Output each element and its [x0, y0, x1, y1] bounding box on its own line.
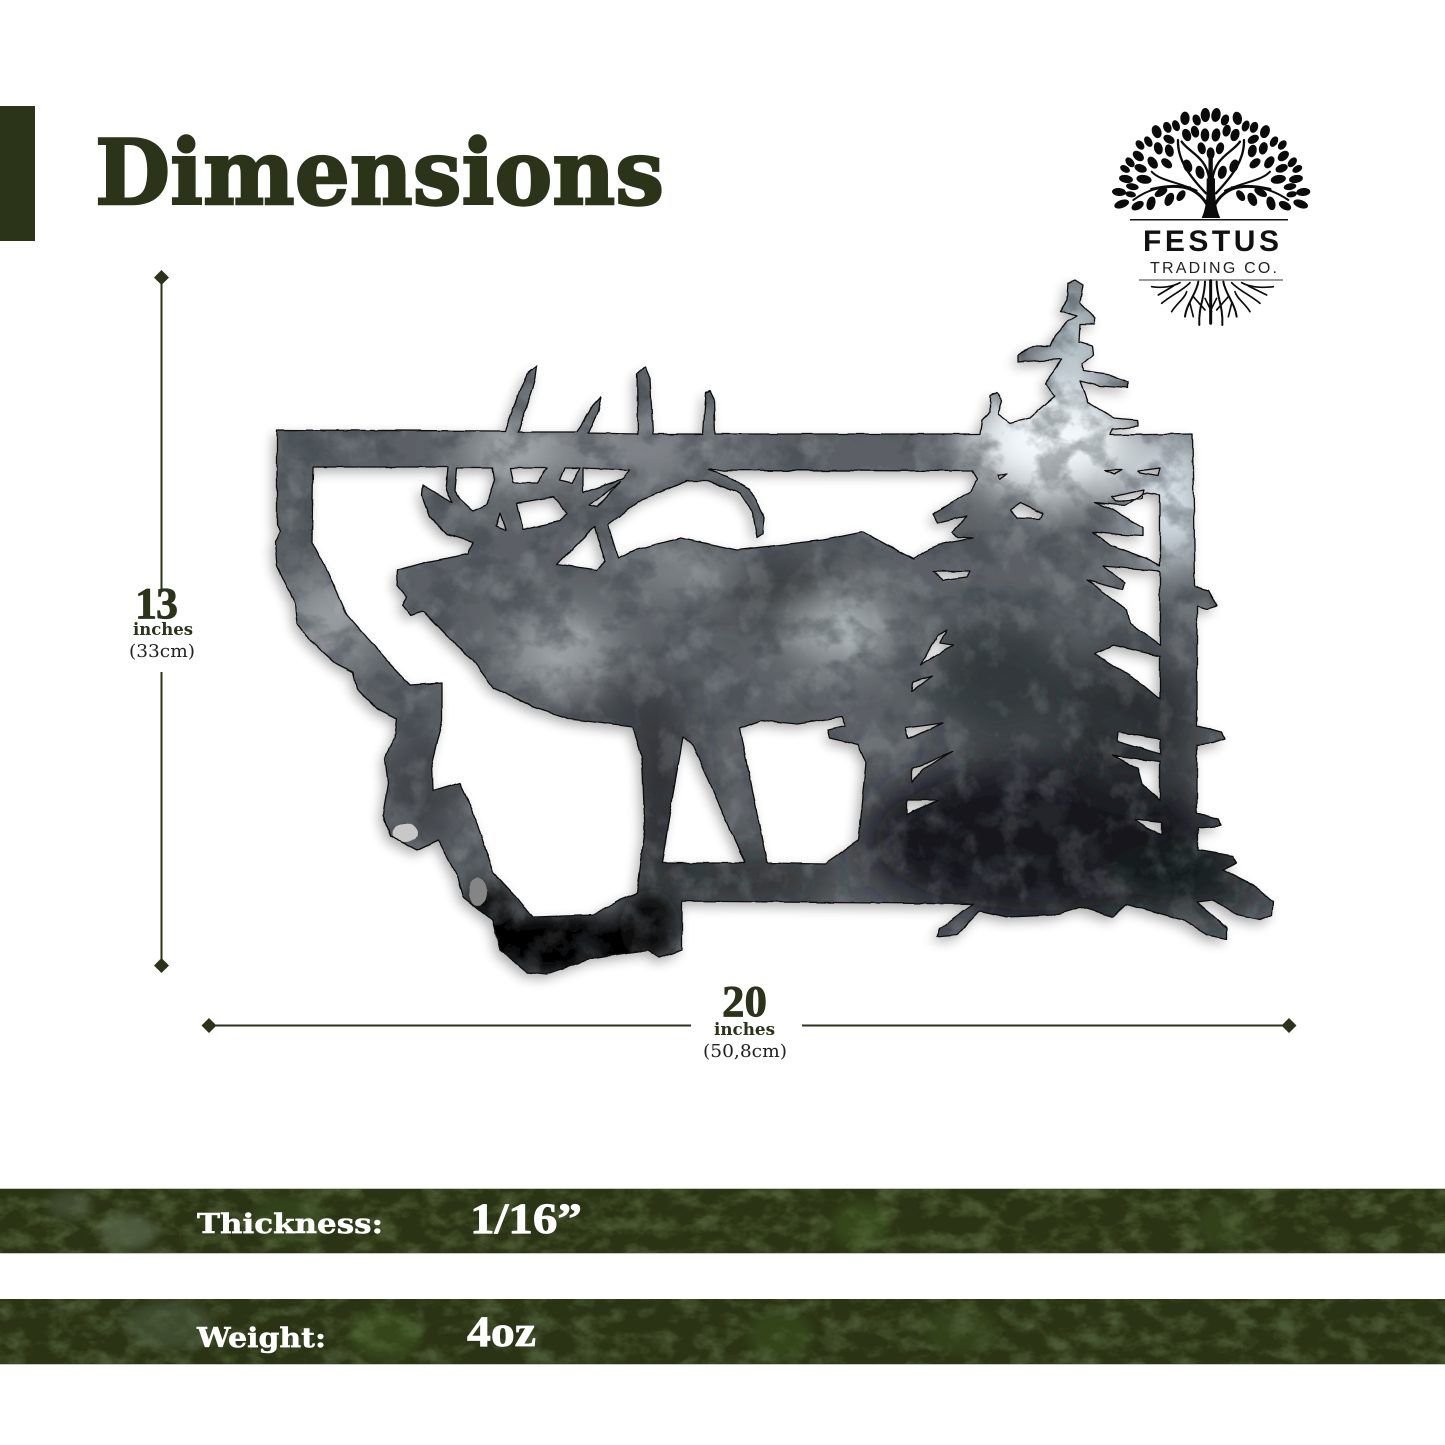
band: weight	[0, 1299, 1445, 1365]
thickness value: 1/16”	[470, 1196, 582, 1243]
width value: 20	[722, 977, 767, 1026]
metal outline	[275, 280, 1273, 974]
icon: tree leaves	[1112, 108, 1310, 212]
logo tagline: TRADING CO.	[1150, 260, 1277, 277]
forest strip	[0, 1299, 1445, 1365]
forest strip	[0, 1188, 1445, 1254]
height metric: (33cm)	[129, 641, 195, 662]
metal sign: elk, Montana outline and pine tree	[260, 270, 1290, 980]
height unit: inches	[133, 620, 193, 640]
weight value: 4oz	[467, 1309, 536, 1356]
dimension: height	[129, 270, 195, 973]
icon: tree roots	[1152, 281, 1273, 325]
width unit: inches	[714, 1020, 775, 1040]
thickness label: Thickness:	[197, 1209, 383, 1240]
light spots	[392, 824, 418, 842]
height value: 13	[135, 579, 178, 628]
logo wordmark: FESTUS	[1143, 225, 1279, 258]
metal shading	[260, 270, 1290, 980]
diamond markers	[202, 1018, 1296, 1033]
metal base	[275, 280, 1273, 974]
accent block	[0, 106, 35, 241]
width metric: (50,8cm)	[703, 1041, 787, 1062]
logo rule lower	[1139, 280, 1283, 281]
logo rule upper	[1130, 219, 1288, 220]
vertical line	[160, 277, 162, 965]
drop shadow	[271, 285, 1269, 979]
horizontal line	[209, 1024, 1289, 1026]
band: thickness	[0, 1188, 1445, 1254]
dimension: width	[202, 977, 1296, 1062]
weight label: Weight:	[196, 1323, 326, 1354]
icon: tree trunk and branches	[1133, 140, 1288, 218]
logo: Festus Trading Co.	[1112, 108, 1310, 325]
diamond markers	[154, 270, 169, 973]
title: Dimensions	[95, 120, 664, 226]
metal body	[260, 270, 1290, 980]
